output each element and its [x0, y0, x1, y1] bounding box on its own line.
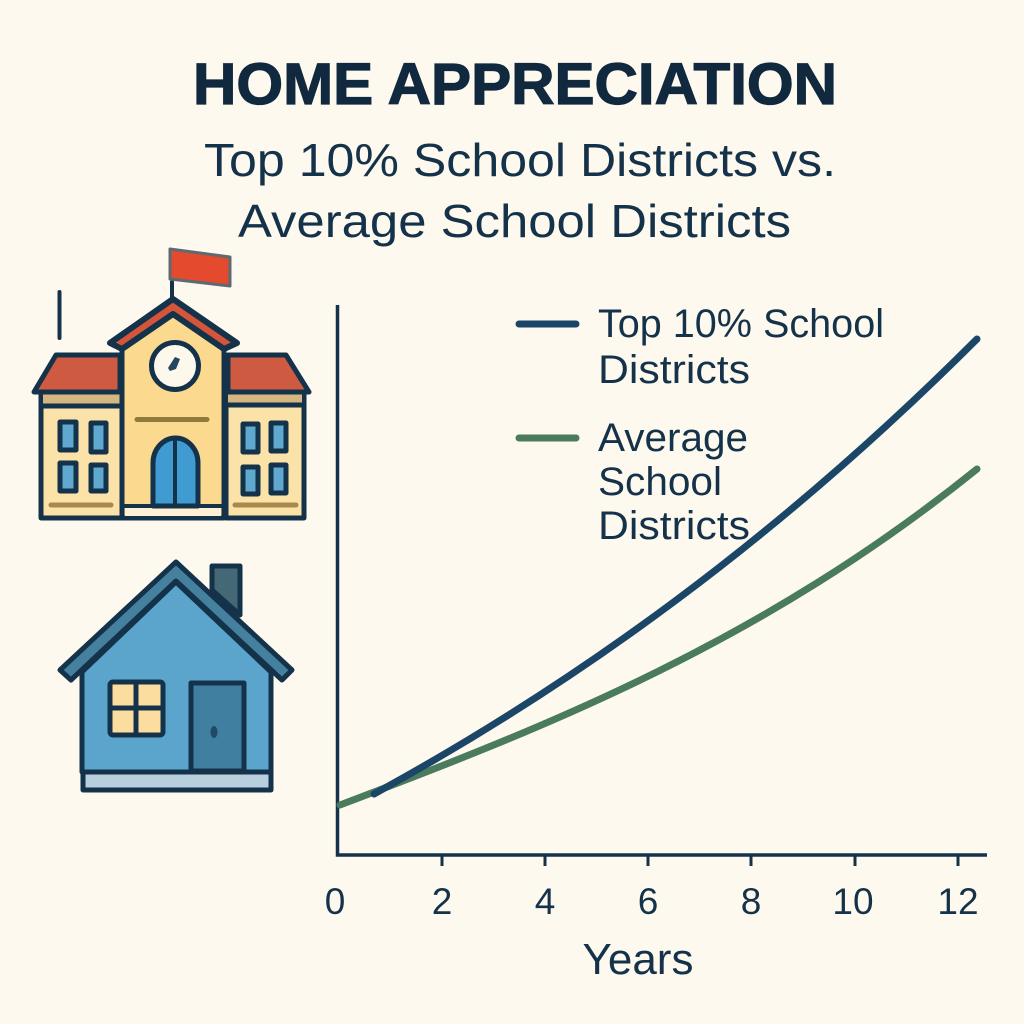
foundation [83, 772, 271, 790]
x-axis labels: 8 [741, 881, 761, 922]
line: top 10% school districts [374, 339, 977, 794]
right wing [226, 355, 309, 518]
door [191, 683, 244, 771]
x-axis ticks [442, 855, 958, 866]
legend: top 10%: Districts [598, 348, 750, 392]
line chart [325, 302, 987, 984]
legend: average [519, 416, 750, 548]
door [153, 438, 198, 506]
house body [82, 582, 271, 772]
x-axis labels [325, 881, 979, 922]
decorative tick [58, 292, 62, 338]
legend: average: Districts [598, 504, 750, 548]
icon: house [60, 562, 292, 790]
x-axis labels: 12 [937, 881, 979, 922]
clock [152, 342, 198, 390]
roof [60, 562, 292, 680]
x-axis title: Years [583, 935, 693, 984]
subtitle: Average School Districts [238, 195, 791, 247]
x-axis labels: 2 [432, 881, 452, 922]
chimney [212, 566, 240, 615]
x-axis labels: 10 [832, 881, 874, 922]
legend [519, 302, 884, 548]
title: HOME APPRECIATION [193, 52, 837, 117]
legend: average: School [598, 460, 722, 504]
subtitle [204, 134, 836, 247]
legend: top 10%: Top 10% School [598, 302, 884, 346]
line: average school districts [340, 469, 977, 805]
central tower [110, 299, 237, 518]
window [110, 682, 163, 735]
legend: average: Average [598, 416, 748, 460]
x-axis labels: 4 [535, 881, 555, 922]
x-axis labels: 0 [325, 881, 345, 922]
icon: school building [34, 249, 309, 518]
left wing [34, 355, 122, 518]
legend: top 10% [519, 302, 884, 392]
subtitle: Top 10% School Districts vs. [204, 134, 836, 186]
x-axis labels: 6 [638, 881, 658, 922]
axes [338, 305, 987, 855]
icon: flag [170, 249, 230, 300]
